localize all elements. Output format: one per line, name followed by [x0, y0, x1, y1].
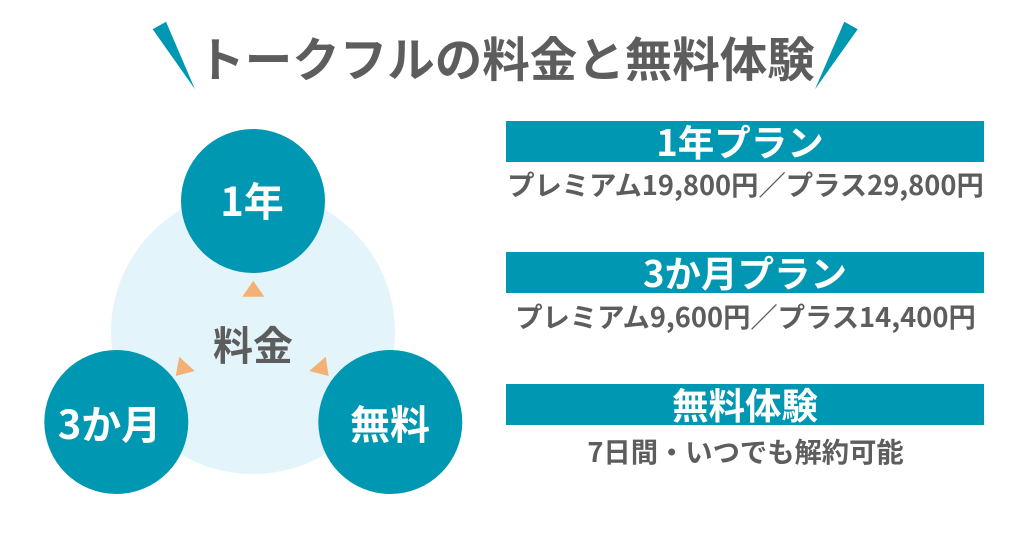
icon: left title accent [152, 22, 195, 90]
plan prices: 1年: プレミアム19,800円／プラス29,800円 [507, 163, 984, 203]
plan details: 無料体験: 7日間・いつでも解約可能 [587, 430, 904, 470]
node: 1年: 1年 [220, 170, 284, 228]
title: トークフルの料金と無料体験 [197, 22, 815, 91]
node: 無料 [318, 350, 462, 494]
center label: 料金 [213, 314, 293, 372]
arrow: lower left [176, 357, 195, 376]
plan heading: 無料体験 [506, 384, 984, 425]
arrow: lower right [309, 357, 329, 376]
plan prices: 3か月: プレミアム9,600円／プラス14,400円 [515, 295, 976, 335]
node: 3か月 [44, 350, 188, 494]
diagram: pricing cycle [44, 129, 462, 494]
node: 無料: 無料 [350, 393, 430, 451]
node: 1年 [181, 129, 325, 273]
icon: right title accent [815, 22, 858, 90]
node: 3か月: 3か月 [58, 393, 161, 451]
plan heading: 3か月プラン [506, 252, 984, 293]
plan heading: 1年プラン [506, 121, 984, 162]
arrow: up [242, 281, 264, 297]
background circle [111, 190, 395, 474]
